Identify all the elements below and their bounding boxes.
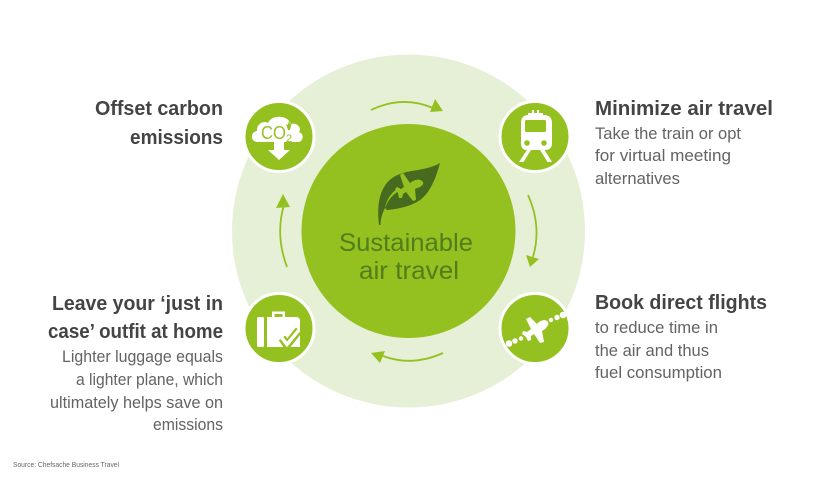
text: leave outfit: a lighter plane, which [76,371,223,389]
text: minimize air travel: alternatives [595,170,680,188]
text: leave outfit: Lighter luggage equals [62,348,223,366]
text: book direct flights [595,292,767,382]
centre circle [302,124,516,338]
arrow: right [526,195,539,267]
heading: offset carbon [95,98,223,149]
text: book direct flights: fuel consumption [595,364,722,382]
text: book direct flights: Book direct flights [595,292,767,314]
source: Source: Chefsache Business Travel [13,460,119,469]
centre circle: air travel [359,257,459,285]
text: minimize air travel: for virtual meeting [595,147,731,165]
text: minimize air travel [595,98,773,188]
icon: suitcase [244,294,314,364]
text: book direct flights: the air and thus [595,342,709,360]
text: leave outfit [48,293,223,434]
text: leave outfit: case’ outfit at home [48,321,223,343]
icon: CO2 cloud: 2 [286,133,292,145]
text: leave outfit: Leave your ‘just in [52,293,223,315]
text: minimize air travel: Minimize air travel [595,98,773,120]
icon: CO2 cloud [244,102,314,172]
heading: offset carbon: emissions [130,127,223,149]
icon: direct flight [500,294,570,364]
text: leave outfit: ultimately helps save on [50,394,223,412]
text: leave outfit: emissions [153,416,223,434]
arrow: left [276,194,290,267]
icon: train [500,102,570,172]
arrow: top [371,99,443,112]
background ring [232,54,585,408]
heading: offset carbon: Offset carbon [95,98,223,120]
text: minimize air travel: Take the train or opt [595,125,741,143]
icon: CO2 cloud: CO [261,123,286,143]
arrow: bottom [371,351,443,363]
icon: leaf with plane [378,163,440,225]
text: book direct flights: to reduce time in [595,319,718,337]
centre title: Sustainable [339,229,473,257]
